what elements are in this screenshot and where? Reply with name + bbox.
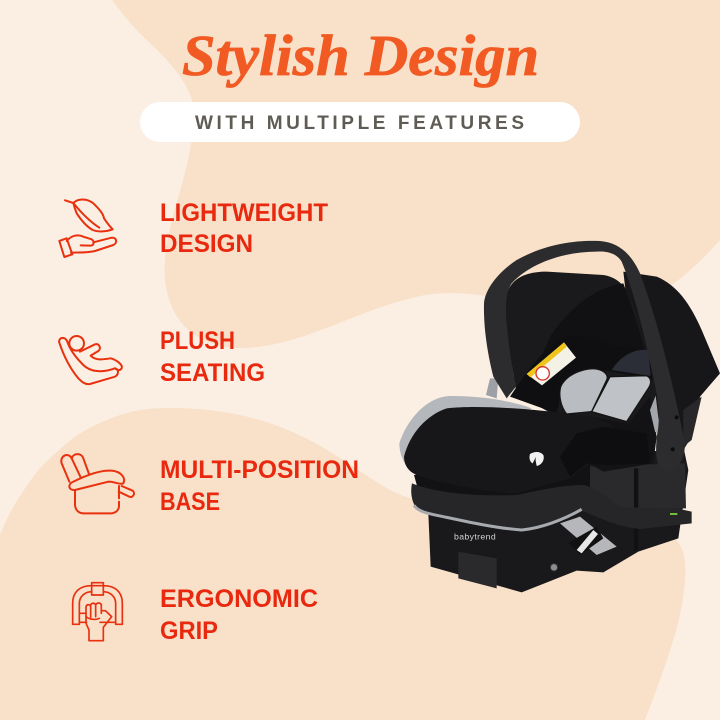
label: ergonomic grip: ERGONOMIC [160, 585, 318, 613]
foot cover black [404, 407, 623, 493]
canopy interior [505, 272, 657, 443]
label: ergonomic grip: GRIP [160, 617, 218, 645]
adjuster knob [550, 564, 558, 571]
label: multi-position base: BASE [160, 488, 220, 516]
gray side tabs [486, 378, 498, 398]
icon: plush seated baby [59, 336, 122, 384]
icon: ergonomic grip [73, 583, 122, 641]
base brand: babytrend [454, 531, 496, 541]
label: plush seating: PLUSH [160, 327, 235, 355]
seat side fabric [577, 397, 657, 472]
foot cover gray trim [399, 396, 532, 470]
base backing behind foot cover [414, 463, 590, 500]
label: plush seating: SEATING [160, 359, 265, 387]
headrest dark [510, 336, 652, 413]
subtitle pill: WITH MULTIPLE FEATURES [195, 113, 524, 134]
icon: feather over hand [59, 200, 116, 257]
label: lightweight design [160, 199, 328, 258]
title: Stylish Design [182, 23, 539, 88]
gray pads [560, 369, 607, 414]
subtitle pill [140, 102, 580, 142]
base gray trim [414, 505, 582, 530]
belt strap [560, 517, 617, 555]
label: lightweight design: LIGHTWEIGHT [160, 199, 328, 227]
label: ergonomic grip [160, 585, 318, 645]
handle [484, 241, 685, 472]
canopy shell [623, 272, 720, 450]
warning label [527, 342, 576, 385]
label: multi-position base [160, 456, 359, 516]
base body [428, 447, 688, 592]
logo on cover [530, 452, 544, 466]
base top lip [411, 483, 692, 530]
green indicator [670, 511, 677, 517]
icon: reclining base [61, 454, 134, 513]
label: lightweight design: DESIGN [160, 230, 253, 258]
infant car seat photo illustration [399, 241, 720, 592]
label: multi-position base: MULTI-POSITION [160, 456, 359, 484]
label: plush seating [160, 327, 265, 387]
